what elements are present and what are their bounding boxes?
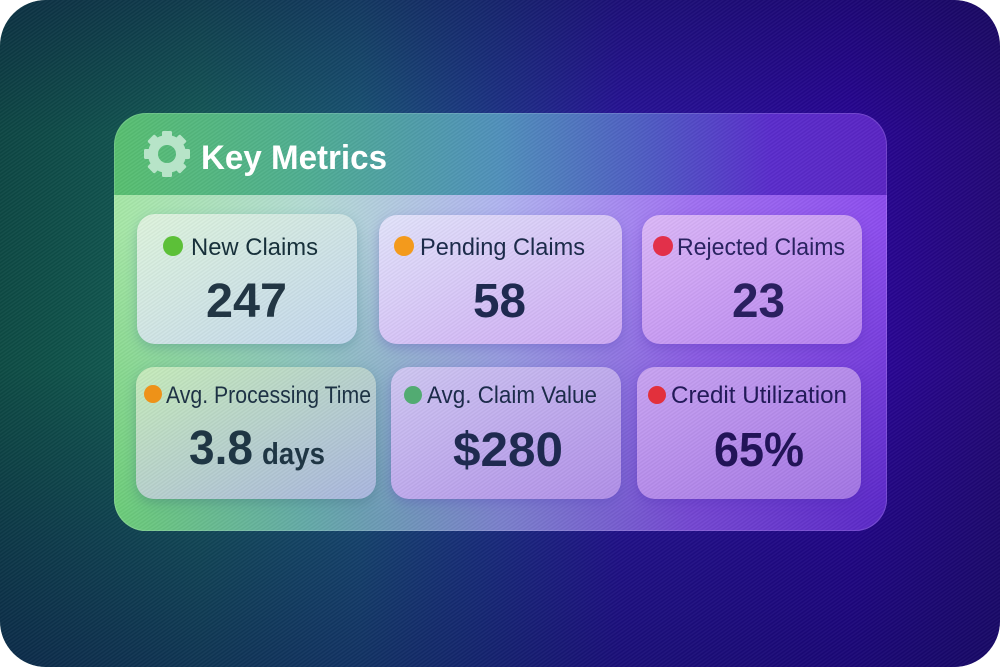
card: rejected claims: Rejected Claims [677,234,845,261]
card: average processing time: 3.8 [189,422,253,475]
card: average processing time: days [262,436,325,471]
card: rejected claims: 23 [732,275,785,328]
card: new claims: 247 [206,275,287,328]
card: average processing time: Avg. Processing Time [166,382,371,409]
card: rejected claims [642,215,862,348]
panel header band [114,113,887,195]
card: average claim value [391,367,621,503]
card: average claim value: $280 [453,424,563,477]
card: pending claims: Pending Claims [420,234,585,261]
card: new claims: New Claims [191,234,318,261]
card: credit utilization: Credit Utilization [671,382,847,409]
panel: key metrics [114,113,887,531]
heading: Key Metrics [201,139,387,177]
card: credit utilization: 65% [714,424,804,477]
icon: gear [144,131,190,177]
card: pending claims [379,215,622,348]
card: credit utilization [637,367,861,503]
card: new claims [137,214,357,348]
card: average claim value: Avg. Claim Value [427,382,597,409]
card: pending claims: 58 [473,275,526,328]
card: average processing time [136,367,376,503]
